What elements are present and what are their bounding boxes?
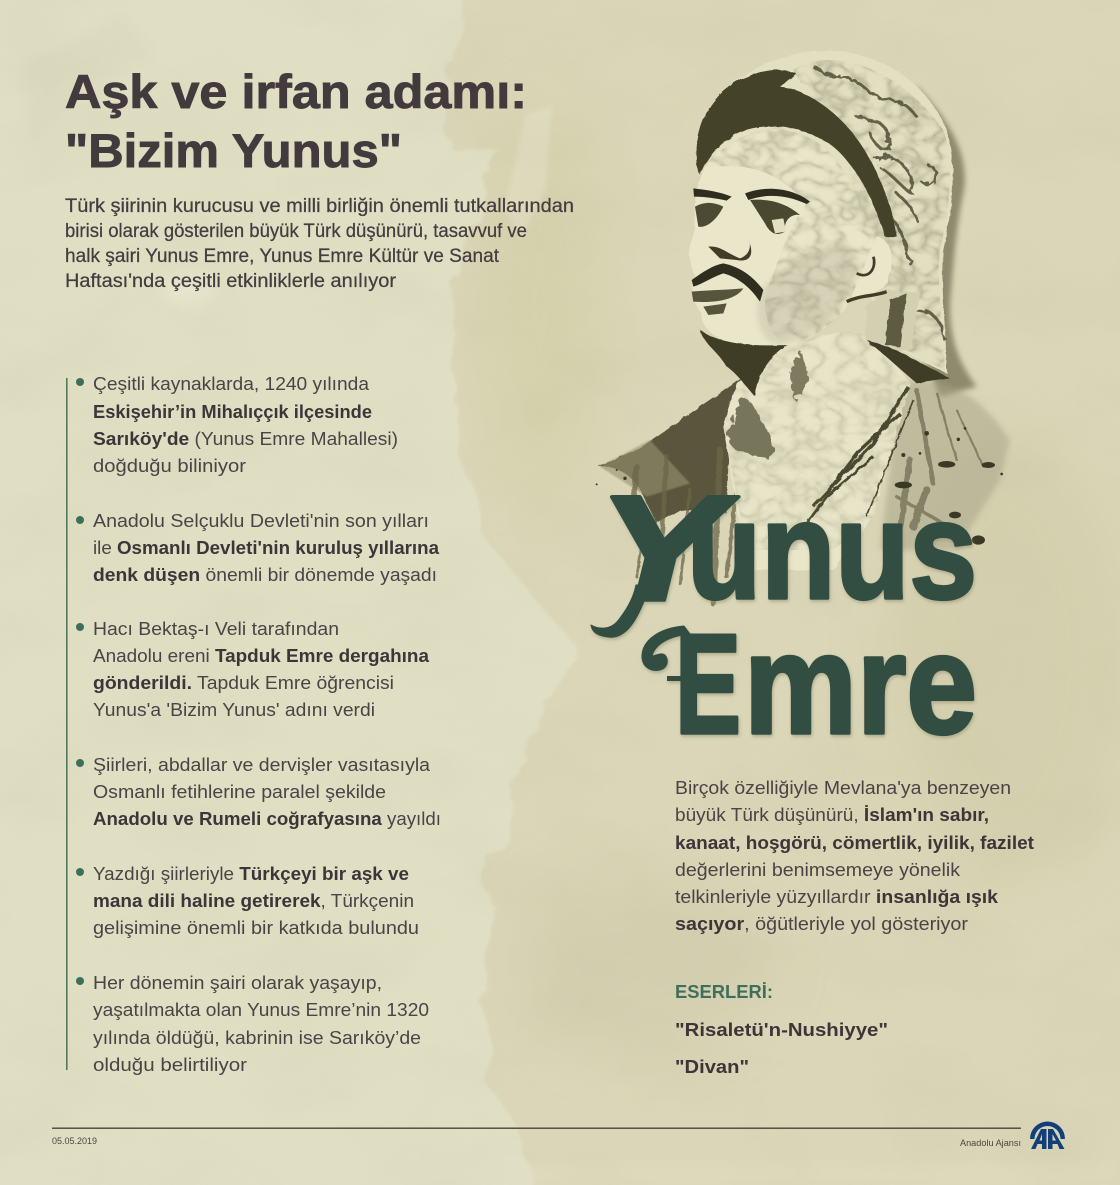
bullet 3: Anadolu ereni Tapduk Emre dergahına — [93, 645, 430, 666]
source: Anadolu Ajansı — [960, 1138, 1021, 1149]
right description text: kanaat, hoşgörü, cömertlik, iyilik, fazilet — [675, 832, 1034, 853]
bullet 4 — [76, 754, 441, 829]
intro text: Haftası'nda çeşitli etkinliklerle anılıyor — [65, 270, 397, 292]
title — [65, 65, 527, 177]
title: Aşk ve irfan adamı: — [65, 65, 527, 118]
date: 05.05.2019 — [52, 1136, 97, 1147]
collar stripes — [807, 343, 913, 523]
bullet 4: Osmanlı fetihlerine paralel şekilde — [93, 781, 386, 802]
eyes — [695, 203, 723, 227]
works list: "Divan" — [675, 1056, 749, 1077]
turban light — [696, 51, 953, 373]
intro text: birisi olarak gösterilen büyük Türk düşünürü, tasavvuf ve — [65, 220, 527, 242]
chest texture — [723, 332, 910, 550]
footer rule — [52, 1128, 1021, 1129]
face texture — [705, 129, 877, 345]
bullet 5: mana dili haline getirerek , Türkçenin — [93, 890, 414, 911]
intro text — [65, 195, 574, 292]
intro text: Türk şiirinin kurucusu ve milli birliğin önemli tutkallarından — [65, 195, 574, 217]
bullet 6: olduğu belirtiliyor — [93, 1054, 247, 1075]
intro text: halk şairi Yunus Emre, Yunus Emre Kültür ve Sanat — [65, 245, 500, 267]
works list: "Risaletü'n-Nushiyye" — [675, 1019, 888, 1040]
bullet 1: Sarıköy'de (Yunus Emre Mahallesi) — [93, 428, 398, 449]
word: Emre: mre — [744, 605, 977, 764]
bullet 6: Her dönemin şairi olarak yaşayıp, — [93, 972, 382, 993]
word: Yunus — [591, 464, 977, 637]
eyebrows — [693, 188, 732, 201]
word: Yunus: Y — [596, 464, 739, 632]
right description text: Birçok özelliğiyle Mevlana'ya benzeyen — [675, 777, 1011, 798]
coat brush streaks — [633, 450, 753, 603]
turban texture — [793, 60, 950, 370]
right description text: değerlerini benimsemeye yönelik — [675, 859, 961, 880]
soft shadow around turban — [907, 87, 977, 397]
bullet 5 — [76, 863, 419, 938]
goatee and chin shadow — [700, 330, 787, 397]
ink splashes — [596, 427, 1003, 545]
large name lettering — [591, 464, 977, 764]
bullet 3: gönderildi. Tapduk Emre öğrencisi — [93, 672, 394, 693]
bullet 6 — [76, 972, 429, 1075]
bullet 1 — [76, 373, 398, 476]
bullet 2: denk düşen önemli bir dönemde yaşadı — [93, 564, 437, 585]
bullet 4: Anadolu ve Rumeli coğrafyasına yayıldı — [93, 808, 441, 829]
word: Yunus: unus — [687, 474, 977, 628]
stubble shading — [757, 246, 857, 345]
works list — [675, 981, 888, 1077]
right description text: büyük Türk düşünürü, İslam'ın sabır, — [675, 804, 989, 825]
bullet 2: Anadolu Selçuklu Devleti'nin son yılları — [93, 510, 429, 531]
bullet 4: Şiirleri, abdallar ve dervişler vasıtasıyla — [93, 754, 431, 775]
neck and chest light — [723, 332, 910, 570]
bullet 1: doğduğu biliniyor — [93, 455, 246, 476]
bullet 1: Eskişehir’in Mihalıççık ilçesinde — [93, 401, 372, 422]
bullet 5: gelişimine önemli bir katkıda bulundu — [93, 917, 419, 938]
nose shadow — [708, 240, 751, 261]
moustache and mouth — [692, 263, 763, 302]
embroidery — [727, 398, 772, 457]
portrait illustration — [596, 51, 1010, 603]
dark cap band — [696, 70, 897, 237]
word: Emre — [642, 605, 977, 764]
bullet 5: Yazdığı şiirleriyle Türkçeyi bir aşk ve — [93, 863, 409, 884]
bullet 6: yılında öldüğü, kabrinin ise Sarıköy’de — [93, 1027, 421, 1048]
coat dark left — [597, 378, 747, 523]
ear — [857, 257, 874, 275]
right description text: saçıyor, öğütleriyle yol gösteriyor — [675, 913, 968, 934]
brush strokes right — [880, 381, 1010, 550]
bullet 1: Çeşitli kaynaklarda, 1240 yılında — [93, 373, 370, 394]
bullet 2: ile Osmanlı Devleti'nin kuruluş yıllarına — [93, 537, 440, 558]
bullet 6: yaşatılmakta olan Yunus Emre’nin 1320 — [93, 999, 429, 1020]
bullet 2 — [76, 510, 440, 585]
face light — [689, 129, 892, 346]
turban tail — [865, 290, 920, 350]
bullet 3: Yunus'a 'Bizim Yunus' adını verdi — [93, 699, 375, 720]
works list: ESERLERİ: — [675, 981, 773, 1002]
right description text — [675, 777, 1034, 934]
word: Emre: E — [675, 605, 741, 764]
turban ornament — [813, 67, 942, 337]
right description text: telkinleriyle yüzyıllardır insanlığa ışık — [675, 886, 999, 907]
bullet 3: Hacı Bektaş-ı Veli tarafından — [93, 618, 339, 639]
bullet 3 — [76, 618, 430, 720]
title: "Bizim Yunus" — [65, 124, 402, 177]
logo: Anadolu Ajansi — [1030, 1122, 1065, 1149]
timeline line — [66, 378, 68, 1070]
